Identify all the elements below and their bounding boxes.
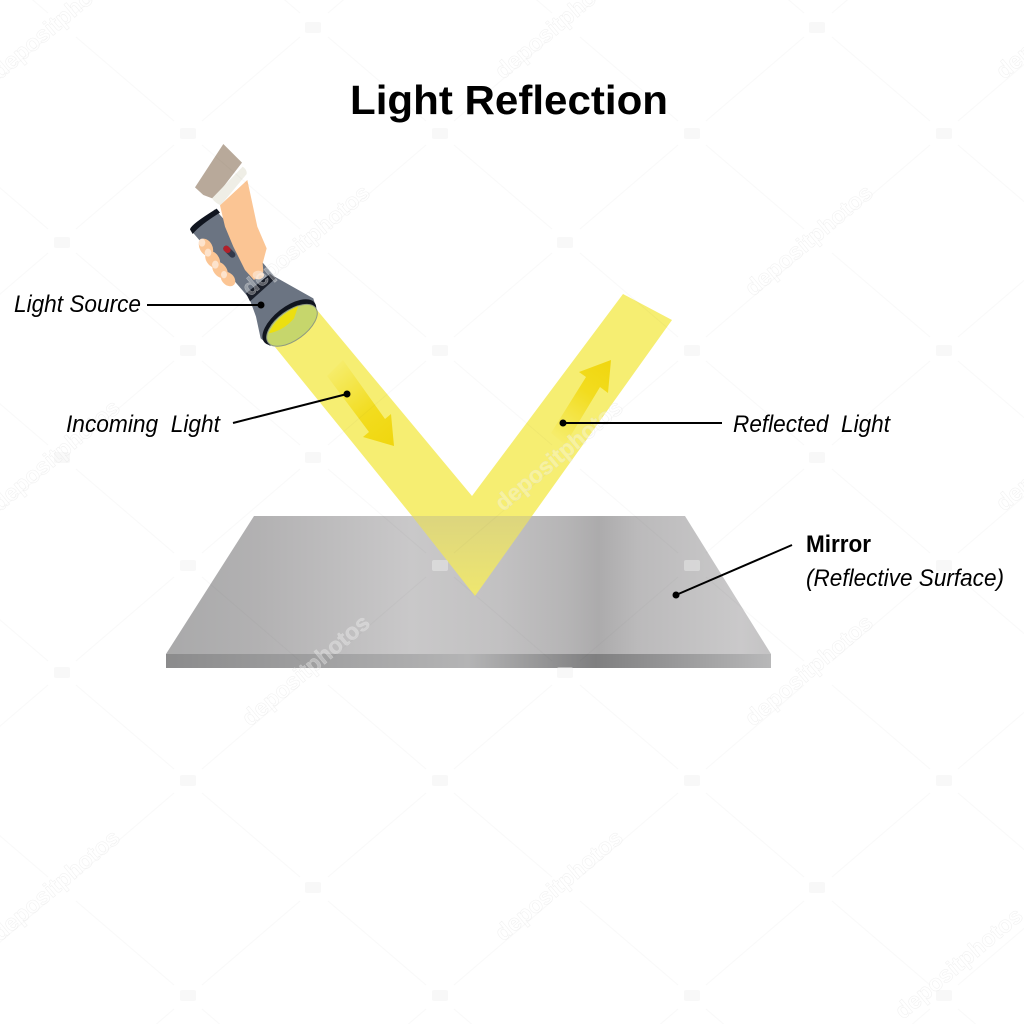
cuff [212,167,247,205]
switch [222,244,237,259]
mirror top surface [166,516,771,654]
watermark text: depositphotos [237,609,375,731]
watermark text: depositphotos [490,394,628,516]
watermark text: depositphotos [740,609,878,731]
fingers [196,236,238,289]
lens highlight [269,306,298,333]
label: mirror [672,531,1004,598]
label: mirror: (Reflective Surface) [806,565,1004,592]
label: reflected light: Reflected Light [733,411,891,438]
watermark text: depositphotos [490,824,628,946]
fingernails [199,239,227,278]
beam over mirror [412,516,532,596]
label: light source: Light Source [14,291,141,318]
lens rim [255,291,324,354]
beam above mirror [275,294,672,516]
label: mirror: Mirror [806,531,871,558]
thumb tip [253,271,264,279]
mirror [166,516,771,668]
hand [220,180,267,280]
label: incoming light [66,390,350,438]
title: Light Reflection [350,77,668,123]
label: incoming light: Incoming Light [66,411,221,438]
incoming light arrow [327,360,394,446]
watermark text: depositphotos [237,179,375,301]
end cap [190,209,220,234]
reflected light arrow [551,360,611,445]
sleeve [195,144,242,199]
light beam [275,294,672,596]
label: reflected light [560,411,891,438]
mirror front edge [166,654,771,668]
lens [260,296,324,354]
neck ring [246,274,276,301]
label: light source [14,291,264,318]
flashlight body [191,209,317,346]
flashlight and hand [190,144,324,354]
watermark text: depositphotos [890,902,1024,1024]
watermark text: depositphotos [740,179,878,301]
